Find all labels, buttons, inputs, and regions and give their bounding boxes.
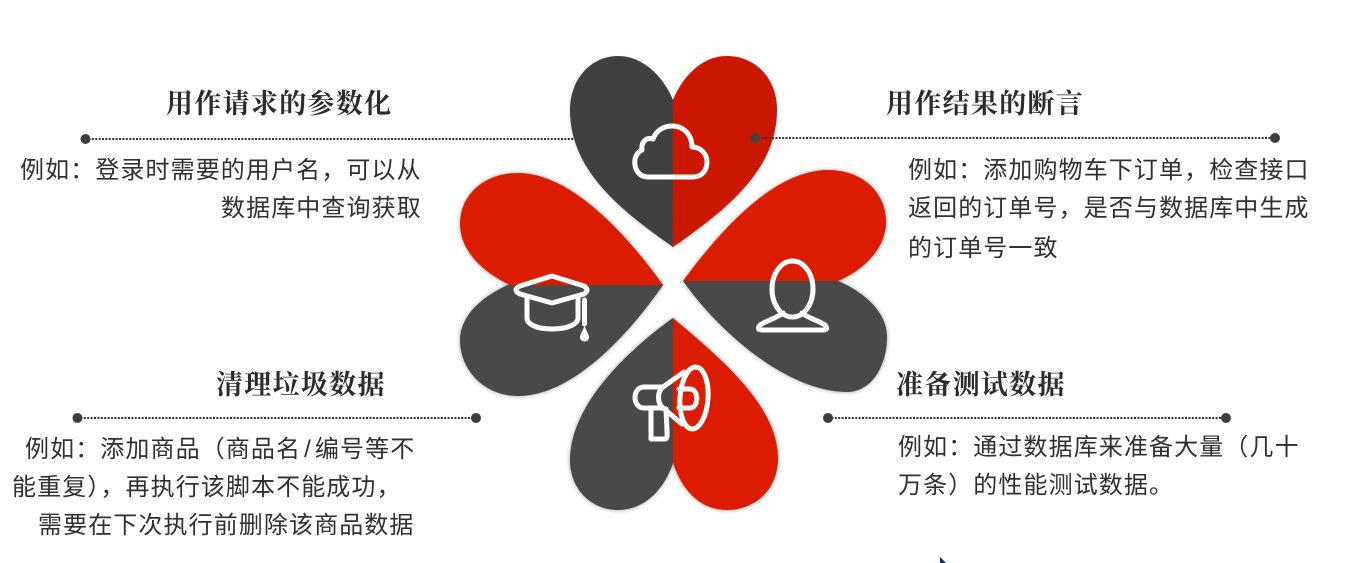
icon: mouse cursor [940,557,946,563]
heading: top right: 用作结果的断言 [886,89,1084,119]
connector: bottom right [823,413,1231,423]
icon: megaphone [635,366,710,439]
connector: bottom left [72,413,481,423]
heading: top left: 用作请求的参数化 [166,89,392,119]
connector: top right [750,133,1280,143]
icon: graduation cap [516,276,589,342]
text: bottom left line 2: 能重复），再执行该脚本不能成功， [12,474,402,501]
text: top right line 2: 返回的订单号，是否与数据库中生成 [908,195,1310,222]
icon: person [758,261,827,330]
text: top left line 1: 例如：登录时需要的用户名，可以从 [20,157,422,184]
text: top right line 3: 的订单号一致 [908,235,1059,262]
petal: right [683,170,887,392]
text: bottom right line 2: 万条）的性能测试数据。 [898,472,1174,499]
text: top left line 2: 数据库中查询获取 [221,195,422,222]
petal: left [460,173,663,396]
icon: cloud [635,126,707,177]
text: top right line 1: 例如：添加购物车下订单，检查接口 [908,157,1310,184]
petal: top heart [570,56,777,247]
petal: bottom heart [570,318,778,510]
text: bottom left line 1: 例如：添加商品（商品名/编号等不 [25,436,415,463]
text: bottom right line 1: 例如：通过数据库来准备大量（几十 [898,434,1300,461]
heading: bottom left: 清理垃圾数据 [216,370,386,400]
text: bottom left line 3: 需要在下次执行前删除该商品数据 [38,512,414,539]
heading: bottom right: 准备测试数据 [896,370,1066,400]
connector: top left [80,134,580,144]
